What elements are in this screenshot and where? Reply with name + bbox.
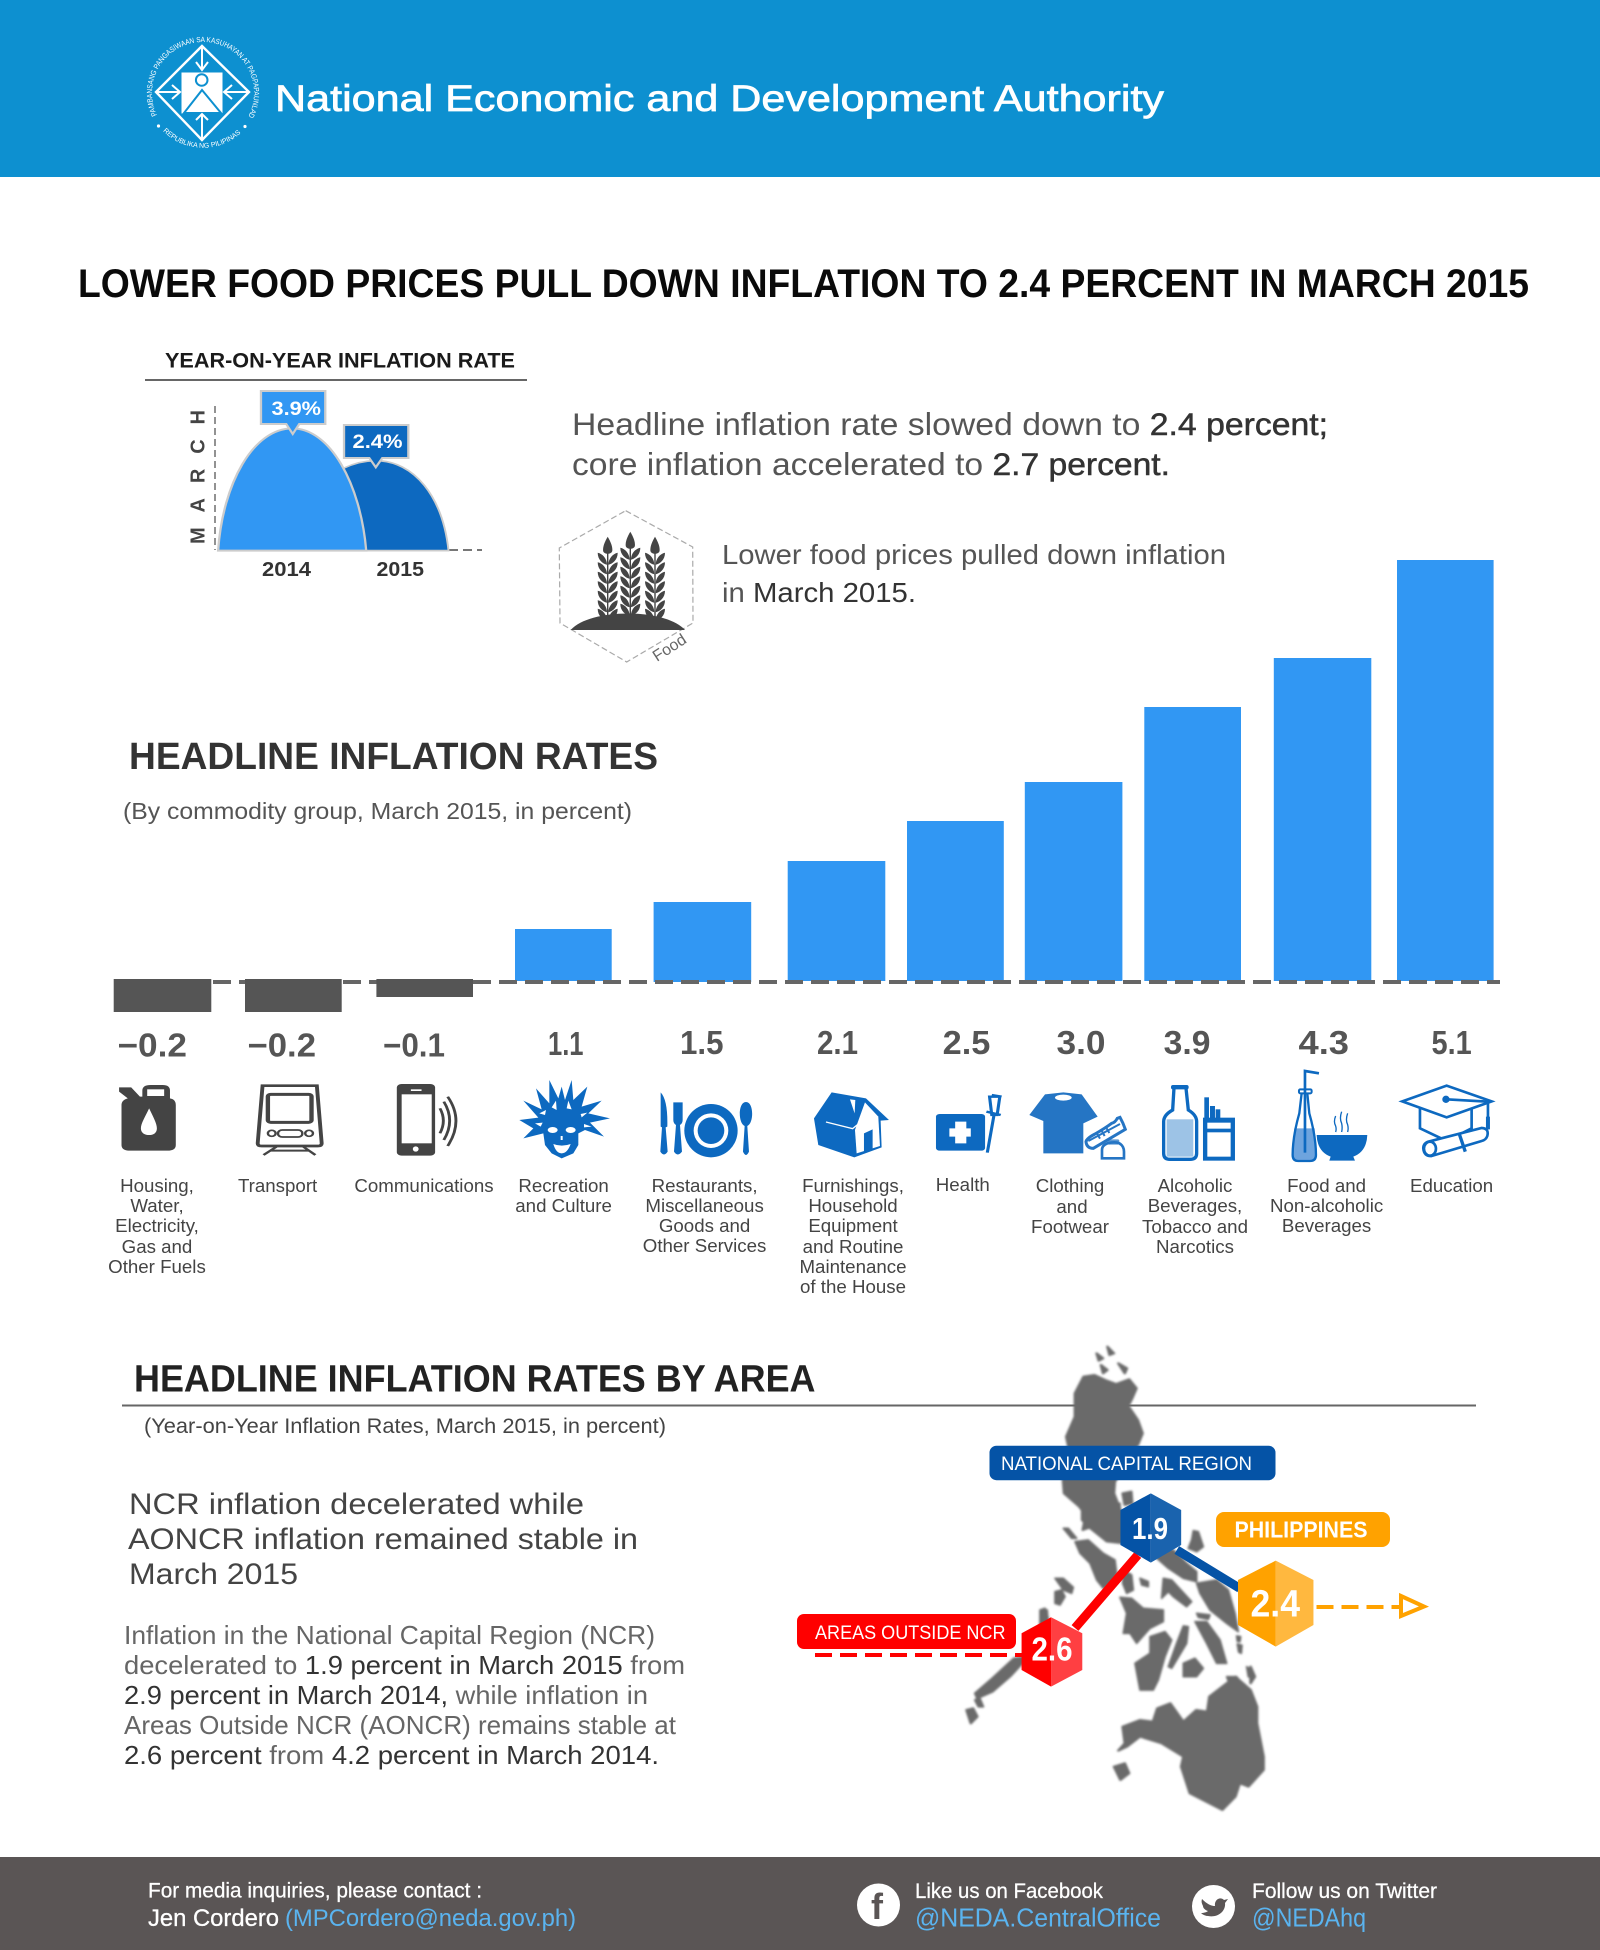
year labels: 2015 <box>376 559 424 581</box>
icon: graduation cap and diploma <box>1402 1086 1492 1156</box>
label: national capital region: NATIONAL CAPITAL REGION <box>1001 1454 1252 1475</box>
label: recreation: and Culture <box>515 1195 612 1216</box>
label: restaurants: Other Services <box>643 1235 766 1256</box>
label: areas outside NCR <box>797 1614 1016 1649</box>
hexagon: NCR: 1.9 <box>1132 1511 1168 1546</box>
headline text block: core inflation accelerated to 2.7 percent. <box>572 446 1170 482</box>
map: Philippines <box>966 1347 1264 1810</box>
paragraph: 2.6 percent from 4.2 percent in March 2014. <box>124 1740 659 1770</box>
value labels: 1.1 <box>548 1025 584 1062</box>
value labels: −0.1 <box>383 1026 445 1064</box>
label: restaurants: Miscellaneous <box>645 1195 764 1216</box>
label: food: Non-alcoholic <box>1270 1195 1383 1216</box>
callout 3.9%: 3.9% <box>272 399 321 420</box>
label: furnishings: Household <box>808 1195 898 1216</box>
panel: year-on-year inflation rate <box>145 350 527 581</box>
paragraph <box>124 1620 685 1770</box>
label: housing: Gas and <box>122 1236 192 1257</box>
value labels <box>118 1024 1472 1064</box>
icon: facebook <box>857 1884 900 1927</box>
label: housing: Housing, <box>120 1175 194 1196</box>
year labels <box>262 559 424 581</box>
label: alcoholic: Alcoholic <box>1158 1175 1232 1196</box>
icon: facebook: f <box>871 1886 884 1927</box>
label: philippines <box>1216 1512 1390 1547</box>
label: transport: Transport <box>238 1175 318 1196</box>
icon: cutlery and plate <box>660 1092 752 1157</box>
twitter text <box>1252 1880 1437 1932</box>
category labels <box>108 1174 1493 1297</box>
twitter text: @NEDAhq <box>1252 1902 1366 1932</box>
icon: food wheat hexagon <box>559 511 693 665</box>
label: clothing: Footwear <box>1031 1216 1109 1237</box>
label: health: Health <box>936 1174 990 1195</box>
facebook text: Like us on Facebook <box>915 1880 1103 1903</box>
icon: house <box>814 1092 889 1157</box>
subheading: year-on-year by area: (Year-on-Year Inflation Rates, March 2015, in percent) <box>144 1415 666 1438</box>
food text block: Lower food prices pulled down inflation <box>722 539 1226 570</box>
NCR subhead: March 2015 <box>129 1558 298 1591</box>
label: housing: Other Fuels <box>108 1256 206 1277</box>
hexagon: Philippines: 2.4 <box>1250 1584 1300 1626</box>
headline text block: Headline inflation rate slowed down to 2.4 percent; <box>572 406 1328 442</box>
label: housing: Electricity, <box>115 1215 199 1236</box>
paragraph: Inflation in the National Capital Region (NCR) <box>124 1620 655 1650</box>
icon: festival mask <box>519 1080 610 1158</box>
heading: headline inflation rates: HEADLINE INFLATION RATES <box>129 736 658 778</box>
value labels: 3.0 <box>1056 1024 1106 1061</box>
value labels: 5.1 <box>1432 1024 1472 1061</box>
icon: fuel can <box>119 1085 176 1151</box>
food text block <box>722 539 1226 608</box>
label: recreation: Recreation <box>518 1175 609 1196</box>
media contact: (MPCordero@neda.gov.ph) <box>285 1905 576 1932</box>
icon: shirt and shoes <box>1029 1092 1125 1158</box>
value labels: 2.1 <box>817 1024 858 1061</box>
label: areas outside NCR: AREAS OUTSIDE NCR <box>815 1623 1006 1644</box>
label: clothing: Clothing <box>1036 1175 1104 1196</box>
header band <box>0 0 1600 177</box>
value labels: −0.2 <box>248 1026 316 1064</box>
label: alcoholic: Narcotics <box>1156 1236 1234 1257</box>
label: alcoholic: Beverages, <box>1148 1195 1242 1216</box>
label: food: Beverages <box>1282 1215 1371 1236</box>
footer <box>0 1857 1600 1950</box>
media contact: Jen Cordero <box>148 1905 279 1932</box>
arrow: orange dashed <box>1316 1596 1424 1616</box>
title: LOWER FOOD PRICES PULL DOWN INFLATION TO 2.4 PERCENT IN MARCH 2015 <box>78 262 1529 306</box>
value labels: −0.2 <box>118 1026 187 1064</box>
icon: food wheat hexagon: Food <box>650 631 690 665</box>
paragraph: decelerated to 1.9 percent in March 2015 from <box>124 1650 685 1680</box>
label: housing: Water, <box>130 1195 184 1216</box>
arrow: red dashed <box>815 1653 1022 1657</box>
icon: bottle and cigarettes <box>1164 1085 1235 1161</box>
arch chart <box>218 391 449 551</box>
label: communications: Communications <box>354 1175 494 1196</box>
media contact <box>148 1880 576 1932</box>
label: education: Education <box>1410 1175 1493 1196</box>
paragraph: 2.9 percent in March 2014, while inflation in <box>124 1680 648 1710</box>
hexagon: Philippines <box>1238 1561 1313 1647</box>
value labels: 2.5 <box>943 1024 990 1061</box>
label: furnishings: Furnishings, <box>802 1175 904 1196</box>
icons row: mask, cutlery, house <box>519 1080 889 1158</box>
label: national capital region <box>990 1446 1276 1480</box>
label: food: Food and <box>1287 1175 1366 1196</box>
facebook text <box>915 1880 1161 1932</box>
icon: first aid and syringe <box>936 1095 1002 1153</box>
hexagon: areas outside NCR <box>1022 1617 1082 1687</box>
label: alcoholic: Tobacco and <box>1142 1216 1248 1237</box>
icon: train <box>258 1086 322 1155</box>
food text block: in March 2015. <box>722 577 916 608</box>
hexagon: NCR <box>1120 1493 1181 1563</box>
callout 2.4%: 2.4% <box>352 432 403 453</box>
label: furnishings: and Routine <box>803 1236 903 1257</box>
value labels: 1.5 <box>680 1024 724 1061</box>
icon: smartphone <box>397 1084 456 1156</box>
headline text block <box>572 406 1328 482</box>
label: philippines: PHILIPPINES <box>1234 1516 1368 1542</box>
bar chart <box>114 560 1500 1012</box>
NCR subhead: AONCR inflation remained stable in <box>128 1523 638 1556</box>
value labels: 4.3 <box>1298 1024 1349 1061</box>
label: furnishings: Equipment <box>808 1215 898 1236</box>
agency name: National Economic and Development Authority <box>275 78 1165 119</box>
twitter text: Follow us on Twitter <box>1252 1880 1437 1903</box>
icon: NEDA logo: PAMBANSANG PANGASIWAAN SA KASUHAYAN AT PAGPAPAUNLAD <box>146 36 260 118</box>
media contact: For media inquiries, please contact : <box>148 1880 482 1902</box>
facebook text: @NEDA.CentralOffice <box>915 1902 1161 1932</box>
label: restaurants: Restaurants, <box>652 1175 758 1196</box>
NCR subhead: NCR inflation decelerated while <box>129 1488 584 1521</box>
label: restaurants: Goods and <box>659 1215 750 1236</box>
icons row: left group <box>119 1084 456 1156</box>
icon: bottle and soup bowl <box>1293 1071 1367 1161</box>
subheading: commodity group: (By commodity group, March 2015, in percent) <box>123 798 632 824</box>
connector lines <box>1075 1550 1240 1628</box>
label: clothing: and <box>1056 1196 1088 1217</box>
label: furnishings: Maintenance <box>799 1256 907 1277</box>
axis label: March: MARCH <box>188 410 210 544</box>
chart heading: YEAR-ON-YEAR INFLATION RATE <box>165 350 515 372</box>
heading: by area: HEADLINE INFLATION RATES BY AREA <box>134 1358 816 1400</box>
icon: twitter <box>1192 1885 1235 1928</box>
icons row: right group <box>1029 1071 1492 1161</box>
label: furnishings: of the House <box>800 1276 906 1297</box>
hexagon: areas outside NCR: 2.6 <box>1032 1630 1072 1668</box>
paragraph: Areas Outside NCR (AONCR) remains stable at <box>124 1710 677 1740</box>
icon: NEDA logo: REPUBLIKA NG PILIPINAS <box>163 128 240 148</box>
NCR subhead <box>128 1488 638 1591</box>
year labels: 2014 <box>262 559 312 581</box>
value labels: 3.9 <box>1164 1024 1210 1061</box>
